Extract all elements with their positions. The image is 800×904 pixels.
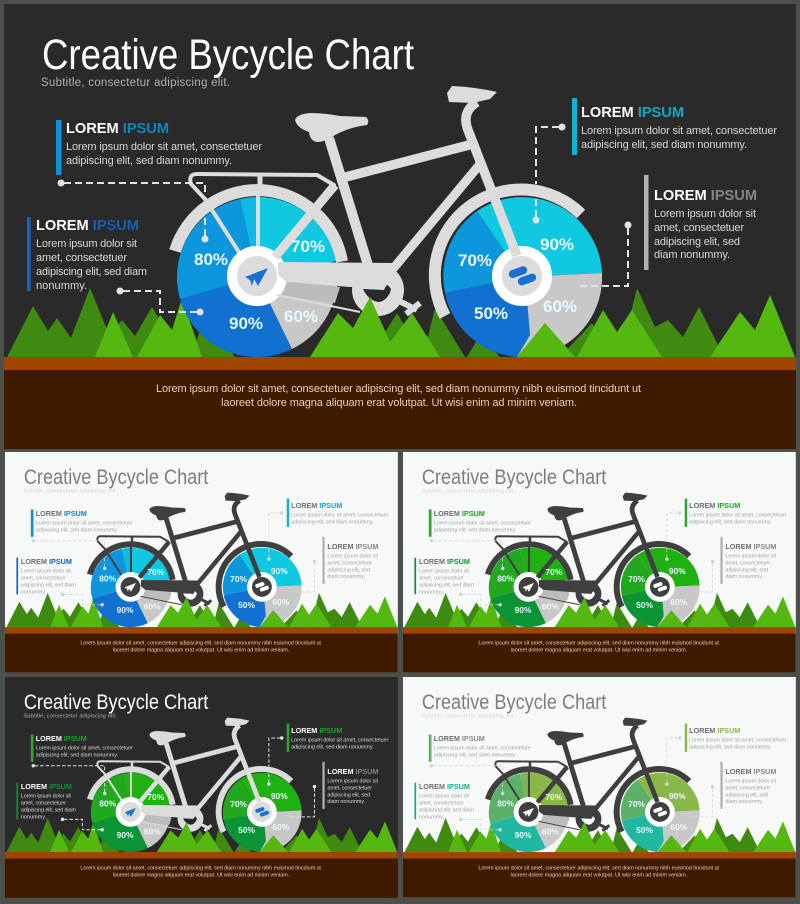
footer text: Lorem ipsum dolor sit amet, consectetuer adipiscing elit, sed diam nonummy nibh euismod tincidunt ut	[156, 383, 641, 395]
callout: lower left: nonummy.	[419, 814, 445, 820]
footer text: Lorem ipsum dolor sit amet, consectetuer adipiscing elit, sed diam nonummy nibh euismod tincidunt ut	[478, 640, 719, 646]
footer text: Lorem ipsum dolor sit amet, consectetuer adipiscing elit, sed diam nonummy nibh euismod tincidunt ut	[80, 865, 321, 871]
back trees	[6, 593, 363, 627]
callout: top right: LOREM IPSUM	[689, 726, 740, 735]
callout: right: diam nonummy.	[327, 574, 366, 580]
back trees	[404, 818, 761, 852]
footer text: laoreet dolore magna aliquam erat volutpat. Ut wisi enim ad minim veniam.	[113, 872, 290, 878]
front trees	[157, 821, 397, 852]
footer panel	[5, 634, 398, 673]
callout: top right	[287, 499, 389, 527]
panel: light blue slide	[5, 452, 398, 673]
callout: lower left: amet, consectetuer	[419, 575, 464, 581]
subtitle: Subtitle, consectetur adipiscing elit.	[421, 489, 515, 495]
title: Creative Bycycle Chart	[422, 690, 606, 714]
percent labels: 70%	[230, 574, 248, 584]
callout: top right: adipiscing elit, sed diam nonummy.	[291, 744, 374, 750]
percent labels: 70%	[147, 792, 165, 802]
callout: top left: Lorem ipsum dolor sit amet, consectetuer	[434, 745, 531, 751]
percent labels: 60%	[284, 307, 318, 326]
callout: right: Lorem ipsum dolor sit	[725, 779, 776, 785]
callout: lower left: amet, consectetuer	[21, 575, 66, 581]
callout: right: diam nonummy.	[725, 574, 764, 580]
footer panel	[4, 370, 796, 449]
callout: top right: LOREM IPSUM	[581, 105, 684, 121]
callout: top left: adipiscing elit, sed diam nonummy.	[66, 155, 232, 167]
subtitle: Subtitle, consectetur adipiscing elit.	[23, 714, 117, 720]
back trees	[404, 593, 761, 627]
percent labels: 90%	[515, 605, 532, 615]
callout: top right	[685, 499, 787, 527]
leader lines	[58, 124, 632, 316]
percent labels: 60%	[272, 822, 290, 832]
front trees	[157, 596, 397, 627]
ground strip	[5, 627, 398, 634]
callout: right: Lorem ipsum dolor sit	[725, 554, 776, 560]
footer text: laoreet dolore magna aliquam erat volutpat. Ut wisi enim ad minim veniam.	[113, 647, 290, 653]
percent labels: 60%	[542, 827, 559, 837]
callout: lower left: Lorem ipsum dolor sit	[21, 794, 71, 800]
leader lines	[32, 511, 316, 606]
percent labels: 60%	[144, 602, 161, 612]
panel: main dark blue slide	[4, 4, 796, 449]
callout: lower left: Lorem ipsum dolor sit	[419, 794, 469, 800]
callout: lower left	[16, 557, 76, 595]
percent labels: 70%	[545, 567, 563, 577]
callout: lower left: Lorem ipsum dolor sit	[419, 569, 469, 575]
footer text: Lorem ipsum dolor sit amet, consectetuer adipiscing elit, sed diam nonummy nibh euismod tincidunt ut	[478, 865, 719, 871]
title: Creative Bycycle Chart	[24, 690, 208, 714]
callout: top right: adipiscing elit, sed diam nonummy.	[291, 519, 374, 525]
percent labels: 80%	[194, 250, 228, 269]
ground strip	[5, 852, 398, 859]
footer text	[156, 383, 641, 409]
subtitle: Subtitle, consectetur adipiscing elit.	[23, 489, 117, 495]
callout: lower left	[16, 782, 76, 820]
callout: right: LOREM IPSUM	[725, 542, 776, 551]
percent labels: 60%	[670, 597, 688, 607]
title: Creative Bycycle Chart	[42, 31, 414, 79]
callout: right: diam nonummy.	[327, 799, 366, 805]
callout: top right: Lorem ipsum dolor sit amet, consectetuer	[581, 125, 777, 137]
callout: top left: adipiscing elit, sed diam nonummy.	[434, 527, 517, 533]
callout: right: diam nonummy.	[725, 799, 764, 805]
callout: right: amet, consectetuer	[654, 222, 744, 234]
percent labels: 70%	[545, 792, 563, 802]
footer text: laoreet dolore magna aliquam erat volutpat. Ut wisi enim ad minim veniam.	[511, 647, 688, 653]
callout: lower left: amet, consectetuer	[419, 800, 464, 806]
callout: top right	[287, 724, 389, 752]
callout: top left: adipiscing elit, sed diam nonummy.	[434, 752, 517, 758]
callout: top left: adipiscing elit, sed diam nonummy.	[36, 527, 119, 533]
leader lines	[32, 736, 316, 831]
callout: right: Lorem ipsum dolor sit	[654, 208, 756, 220]
title: Creative Bycycle Chart	[24, 465, 208, 489]
bicycle with pie wheels	[488, 718, 700, 852]
callout: right	[322, 537, 378, 584]
footer text	[80, 865, 321, 878]
callout: top left: adipiscing elit, sed diam nonummy.	[36, 752, 119, 758]
callout: top left	[31, 734, 133, 762]
percent labels: 50%	[474, 304, 508, 323]
percent labels	[99, 566, 290, 615]
callout: top right	[572, 98, 777, 155]
callout: top left: LOREM IPSUM	[434, 734, 485, 743]
callout: right	[322, 762, 378, 809]
callout: lower left: LOREM IPSUM	[419, 782, 470, 791]
callout: right: amet, consectetuer	[725, 561, 770, 567]
panel: dark green slide	[5, 677, 398, 898]
callout: top right: LOREM IPSUM	[291, 726, 342, 735]
callout: top right: Lorem ipsum dolor sit amet, consectetuer	[291, 512, 389, 518]
callout: right: diam nonummy.	[654, 249, 730, 261]
callout: top left	[429, 509, 531, 537]
back trees	[6, 818, 363, 852]
footer text	[80, 640, 321, 653]
callout: top right: Lorem ipsum dolor sit amet, consectetuer	[689, 737, 787, 743]
percent labels: 80%	[497, 573, 515, 583]
callout: right: adipiscing elit, sed	[725, 793, 768, 799]
percent labels: 90%	[117, 605, 134, 615]
callout: right: LOREM IPSUM	[654, 188, 757, 204]
subtitle: Subtitle, consectetur adipiscing elit.	[421, 714, 515, 720]
callout: lower left: LOREM IPSUM	[21, 557, 72, 566]
callout: top right: Lorem ipsum dolor sit amet, consectetuer	[291, 737, 389, 743]
footer text: laoreet dolore magna aliquam erat volutpat. Ut wisi enim ad minim veniam.	[221, 397, 577, 409]
footer text: laoreet dolore magna aliquam erat volutpat. Ut wisi enim ad minim veniam.	[511, 872, 688, 878]
percent labels: 60%	[144, 827, 161, 837]
callout: lower left: nonummy.	[21, 589, 47, 595]
callout: top left: Lorem ipsum dolor sit amet, consectetuer	[434, 520, 531, 526]
subtitle: Subtitle, consectetur adipiscing elit.	[41, 77, 230, 89]
percent labels: 90%	[669, 791, 686, 801]
callout: top left	[31, 509, 133, 537]
callout: lower left: adipiscing elit, sed diam	[21, 582, 76, 588]
callout: right: adipiscing elit, sed	[327, 568, 370, 574]
callout: top left: LOREM IPSUM	[36, 509, 87, 518]
callout: lower left: LOREM IPSUM	[36, 218, 139, 234]
callout: lower left: nonummy.	[21, 814, 47, 820]
panel: light green slide	[403, 452, 796, 673]
callout: lower left: nonummy.	[419, 589, 445, 595]
callout: lower left	[414, 782, 474, 820]
percent labels	[99, 791, 290, 840]
callout: top right: adipiscing elit, sed diam nonummy.	[581, 139, 747, 151]
callout: right: LOREM IPSUM	[327, 542, 378, 551]
callout: top right: LOREM IPSUM	[291, 501, 342, 510]
back trees	[7, 288, 725, 357]
callout: lower left: LOREM IPSUM	[419, 557, 470, 566]
percent labels: 80%	[99, 798, 117, 808]
callout: top left	[429, 734, 531, 762]
percent labels: 90%	[271, 791, 288, 801]
callout: top left: LOREM IPSUM	[434, 509, 485, 518]
callout: right: LOREM IPSUM	[327, 767, 378, 776]
percent labels: 50%	[238, 825, 255, 835]
percent labels: 90%	[117, 830, 134, 840]
percent labels: 50%	[636, 825, 653, 835]
percent labels: 70%	[628, 574, 646, 584]
footer text: Lorem ipsum dolor sit amet, consectetuer adipiscing elit, sed diam nonummy nibh euismod tincidunt ut	[80, 640, 321, 646]
front trees	[555, 821, 795, 852]
ground strip	[4, 357, 796, 370]
callout: right: Lorem ipsum dolor sit	[327, 554, 378, 560]
title: Creative Bycycle Chart	[422, 465, 606, 489]
callout: top left: Lorem ipsum dolor sit amet, consectetuer	[36, 520, 133, 526]
ground strip	[403, 627, 796, 634]
callout: top left: LOREM IPSUM	[66, 121, 169, 137]
panel: light olive and teal slide	[403, 677, 796, 898]
callout: right: amet, consectetuer	[725, 786, 770, 792]
callout: top right: adipiscing elit, sed diam nonummy.	[689, 519, 772, 525]
callout: right: LOREM IPSUM	[725, 767, 776, 776]
callout: right: adipiscing elit, sed	[327, 793, 370, 799]
callout: top right: Lorem ipsum dolor sit amet, consectetuer	[689, 512, 787, 518]
bicycle with pie wheels	[488, 493, 700, 627]
leader lines	[430, 736, 714, 831]
callout: top left: Lorem ipsum dolor sit amet, consectetuer	[66, 141, 262, 153]
callout: lower left: amet, consectetuer	[21, 800, 66, 806]
callout: top right: LOREM IPSUM	[689, 501, 740, 510]
callout: right: amet, consectetuer	[327, 786, 372, 792]
callout: lower left: adipiscing elit, sed diam	[419, 807, 474, 813]
percent labels: 80%	[99, 573, 117, 583]
callout: right	[720, 762, 776, 809]
footer panel	[403, 634, 796, 673]
callout: lower left: LOREM IPSUM	[21, 782, 72, 791]
bicycle with pie wheels	[90, 493, 302, 627]
callout: right: adipiscing elit, sed	[725, 568, 768, 574]
percent labels	[194, 235, 577, 333]
callout: top left: Lorem ipsum dolor sit amet, consectetuer	[36, 745, 133, 751]
bicycle with pie wheels	[90, 718, 302, 852]
callout: top left	[56, 120, 262, 175]
footer text	[478, 865, 719, 878]
callout: lower left: Lorem ipsum dolor sit	[21, 569, 71, 575]
front trees	[555, 596, 795, 627]
callout: right	[720, 537, 776, 584]
leader lines	[430, 511, 714, 606]
percent labels: 60%	[670, 822, 688, 832]
percent labels: 80%	[497, 798, 515, 808]
percent labels: 60%	[542, 602, 559, 612]
percent labels: 60%	[543, 297, 577, 316]
callout: lower left	[414, 557, 474, 595]
percent labels: 70%	[147, 567, 165, 577]
percent labels: 90%	[669, 566, 686, 576]
percent labels: 70%	[458, 251, 492, 270]
percent labels	[497, 791, 688, 840]
percent labels: 90%	[540, 235, 574, 254]
callout: right: adipiscing elit, sed	[654, 236, 740, 248]
front trees	[310, 295, 795, 357]
callout: top right	[685, 724, 787, 752]
callout: lower left: adipiscing elit, sed diam	[419, 582, 474, 588]
callout: lower left: Lorem ipsum dolor sit	[36, 238, 137, 250]
percent labels: 90%	[515, 830, 532, 840]
callout: lower left: nonummy.	[36, 280, 87, 292]
percent labels: 50%	[636, 600, 653, 610]
callout: lower left	[27, 217, 147, 292]
percent labels: 70%	[291, 237, 325, 256]
percent labels: 60%	[272, 597, 290, 607]
percent labels: 50%	[238, 600, 255, 610]
callout: top left: LOREM IPSUM	[36, 734, 87, 743]
callout: right: Lorem ipsum dolor sit	[327, 779, 378, 785]
ground strip	[403, 852, 796, 859]
callout: lower left: amet, consectetuer	[36, 252, 127, 264]
footer text	[478, 640, 719, 653]
percent labels: 70%	[628, 799, 646, 809]
percent labels: 90%	[229, 314, 263, 333]
percent labels	[497, 566, 688, 615]
percent labels: 90%	[271, 566, 288, 576]
footer panel	[403, 859, 796, 898]
callout: right	[644, 175, 757, 270]
callout: lower left: adipiscing elit, sed diam	[36, 266, 147, 278]
percent labels: 70%	[230, 799, 248, 809]
bicycle with pie wheels	[175, 86, 602, 357]
footer panel	[5, 859, 398, 898]
callout: right: amet, consectetuer	[327, 561, 372, 567]
callout: top right: adipiscing elit, sed diam nonummy.	[689, 744, 772, 750]
callout: lower left: adipiscing elit, sed diam	[21, 807, 76, 813]
